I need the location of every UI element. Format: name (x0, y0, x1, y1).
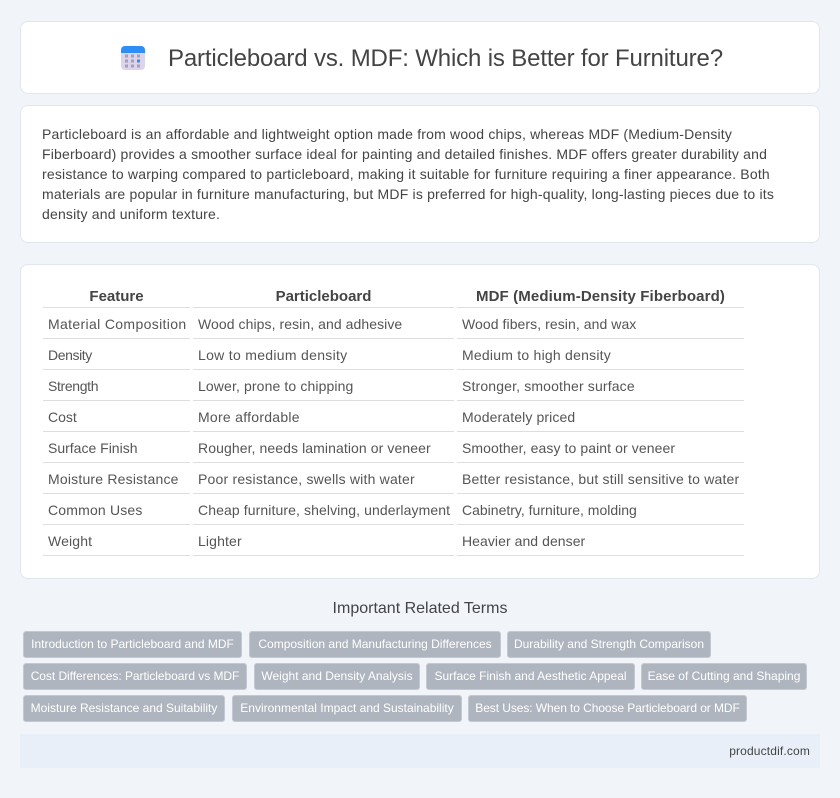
tags: related terms (23, 631, 807, 722)
text block: intro: Particleboard is an affordable and lightweight option made from wood chips, whereas MDF (Medium-Density (42, 126, 732, 142)
heading: related terms: Important Related Terms (333, 600, 507, 617)
tags: related terms: Best Uses: When to Choose Particleboard or MDF (475, 701, 740, 715)
icon: calendar (121, 46, 145, 70)
text: Wood chips, resin, and adhesive (198, 316, 402, 332)
footer: source: productdif.com (729, 744, 810, 758)
text: More affordable (198, 409, 300, 425)
table: comparison: Particleboard (276, 288, 371, 305)
text: Moisture Resistance (48, 471, 179, 487)
text: Wood fibers, resin, and wax (462, 316, 636, 332)
table: comparison (89, 288, 725, 305)
text: Medium to high density (462, 347, 611, 363)
text: Poor resistance, swells with water (198, 471, 415, 487)
text block: intro: Fiberboard) provides a smoother surface ideal for painting and detailed finishes. MDF offers greater durability and (42, 146, 767, 162)
text: Low to medium density (198, 347, 347, 363)
tags: related terms: Cost Differences: Particleboard vs MDF (31, 669, 239, 683)
text: Surface Finish (48, 440, 137, 456)
tags: related terms: Composition and Manufacturing Differences (258, 637, 492, 651)
text block: intro: density and uniform texture. (42, 206, 220, 222)
text: Rougher, needs lamination or veneer (198, 440, 431, 456)
tags: related terms: Moisture Resistance and Suitability (31, 701, 217, 715)
text: Density (48, 347, 92, 363)
text: Strength (48, 378, 98, 394)
tags: related terms: Weight and Density Analysis (261, 669, 413, 683)
text: Material Composition (48, 316, 186, 332)
tags: related terms: Surface Finish and Aesthetic Appeal (434, 669, 627, 683)
text: Smoother, easy to paint or veneer (462, 440, 675, 456)
text: Cost (48, 409, 77, 425)
text: Moderately priced (462, 409, 575, 425)
text: Stronger, smoother surface (462, 378, 635, 394)
text: Lower, prone to chipping (198, 378, 353, 394)
tags: related terms: Durability and Strength Comparison (514, 637, 704, 651)
text block: intro: materials are popular in furniture manufacturing, but MDF is preferred for high-quality, long-lasting pieces due to its (42, 186, 774, 202)
text: Weight (48, 533, 92, 549)
text: Heavier and denser (462, 533, 585, 549)
text: Common Uses (48, 502, 143, 518)
text block: intro: resistance to warping compared to particleboard, making it suitable for furniture requiring a finer appearance. Both (42, 166, 770, 182)
title: Particleboard vs. MDF: Which is Better for Furniture? (168, 45, 723, 72)
tags: related terms: Ease of Cutting and Shaping (648, 669, 800, 683)
table: comparison: MDF (Medium-Density Fiberboard) (476, 288, 725, 305)
panel: header (20, 21, 820, 94)
panel: comparison table (20, 264, 820, 579)
text: Cheap furniture, shelving, underlayment (198, 502, 450, 518)
panel: intro (20, 105, 820, 243)
text: Better resistance, but still sensitive to water (462, 471, 739, 487)
tags: related terms: Introduction to Particleboard and MDF (31, 637, 234, 651)
tags: related terms: Environmental Impact and Sustainability (240, 701, 454, 715)
text: Lighter (198, 533, 242, 549)
text block: intro (42, 126, 774, 222)
text: Cabinetry, furniture, molding (462, 502, 637, 518)
table: comparison: Feature (89, 288, 144, 305)
footer bar (20, 734, 820, 768)
